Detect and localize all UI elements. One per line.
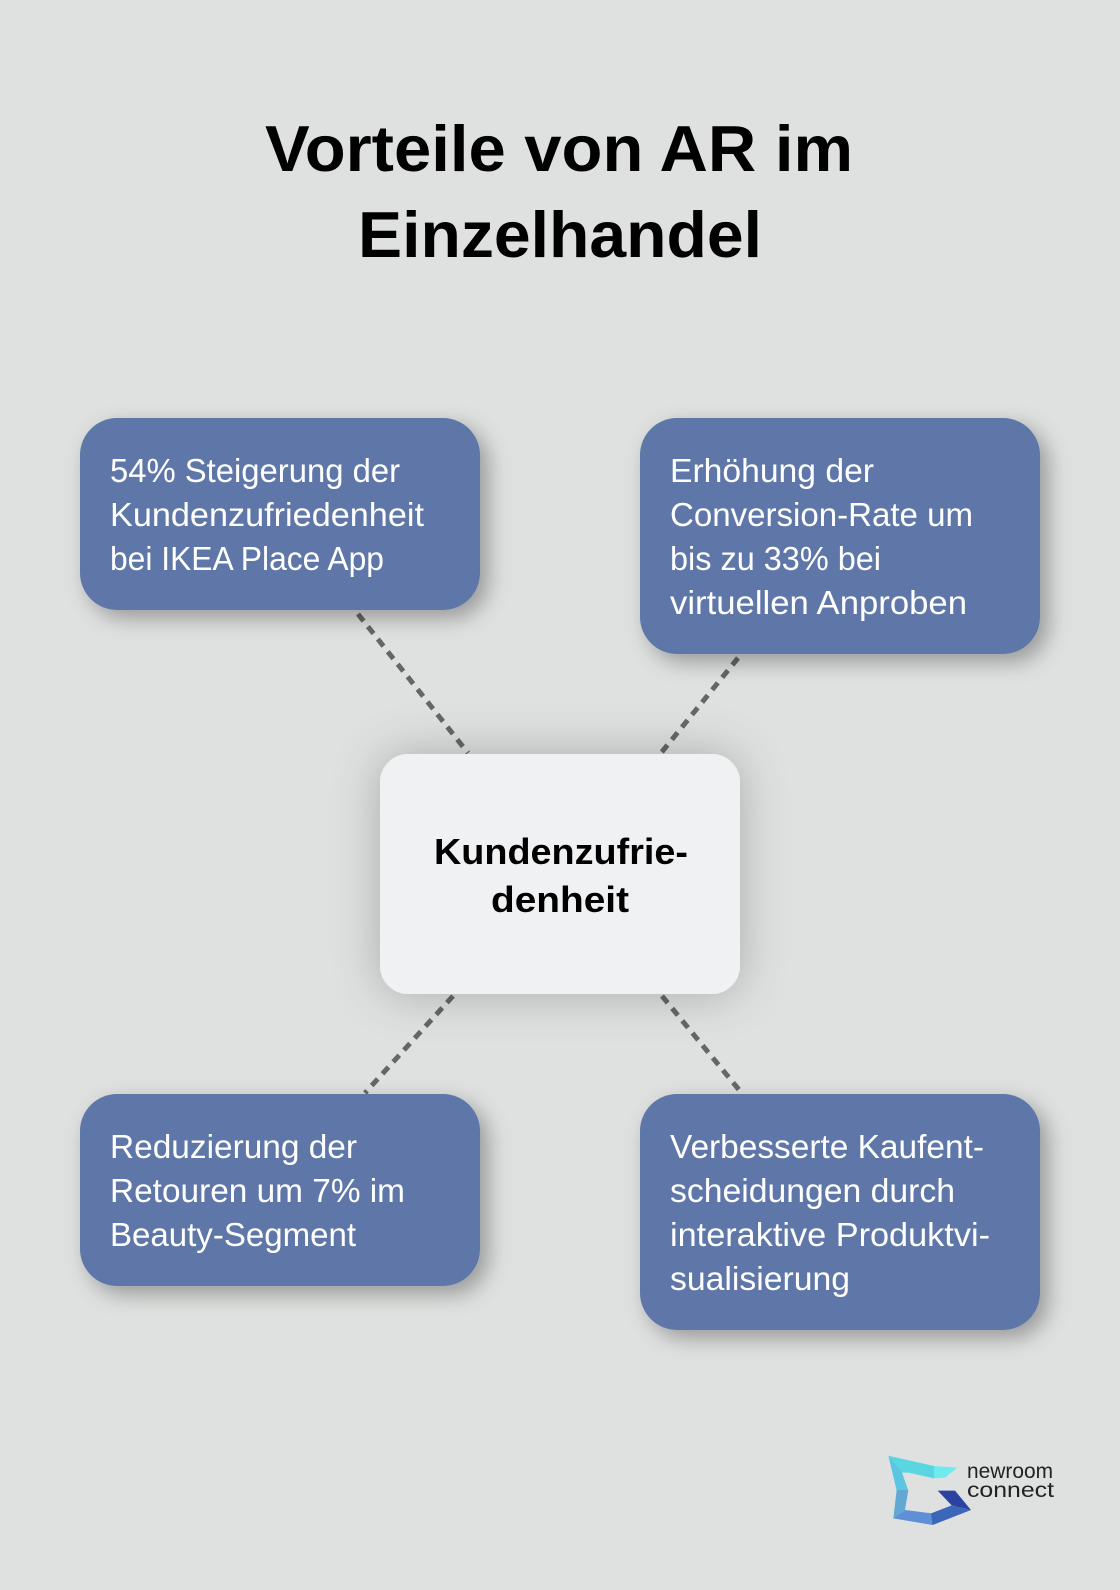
panel: 54% Steigerung: 54% Steigerung der — [110, 452, 400, 489]
panel: Conversion-Rate: Erhöhung der — [670, 452, 874, 489]
connector: top right — [661, 658, 738, 753]
panel: Kaufentscheidungen — [640, 1094, 1040, 1330]
connector: bottom right — [662, 996, 740, 1091]
title: Vorteile von AR im — [265, 112, 853, 185]
connector: bottom left — [365, 996, 453, 1093]
panel: center Kundenzufriedenheit — [380, 754, 740, 994]
panel: center Kundenzufriedenheit: Kundenzufrie- — [434, 831, 688, 872]
connector: top left — [358, 614, 468, 753]
title — [265, 112, 853, 271]
panel: Conversion-Rate: Conversion-Rate um — [670, 496, 973, 533]
panel: 54% Steigerung: Kundenzufriedenheit — [110, 496, 424, 533]
panel: center Kundenzufriedenheit: denheit — [491, 879, 629, 920]
panel: Kaufentscheidungen: interaktive Produktvi- — [670, 1216, 990, 1253]
panel: Conversion-Rate — [640, 418, 1040, 654]
panel: Retouren: Beauty-Segment — [110, 1216, 356, 1253]
icon: logo mark — [888, 1456, 971, 1525]
logo wordmark — [967, 1460, 1054, 1502]
panel: Retouren: Retouren um 7% im — [110, 1172, 405, 1209]
panel: 54% Steigerung — [80, 418, 480, 610]
logo wordmark: newroom — [967, 1460, 1053, 1483]
panel: Conversion-Rate: virtuellen Anproben — [670, 584, 967, 621]
logo: newroom connect — [888, 1456, 1054, 1525]
panel: Retouren: Reduzierung der — [110, 1128, 357, 1165]
logo wordmark: connect — [967, 1479, 1054, 1502]
panel: Retouren — [80, 1094, 480, 1286]
panel: Conversion-Rate: bis zu 33% bei — [670, 540, 881, 577]
panel: Kaufentscheidungen: Verbesserte Kaufent- — [670, 1128, 984, 1165]
panel: 54% Steigerung: bei IKEA Place App — [110, 540, 384, 577]
panel: Kaufentscheidungen: scheidungen durch — [670, 1172, 955, 1209]
title: Einzelhandel — [358, 198, 762, 271]
panel: Kaufentscheidungen: sualisierung — [670, 1260, 850, 1297]
